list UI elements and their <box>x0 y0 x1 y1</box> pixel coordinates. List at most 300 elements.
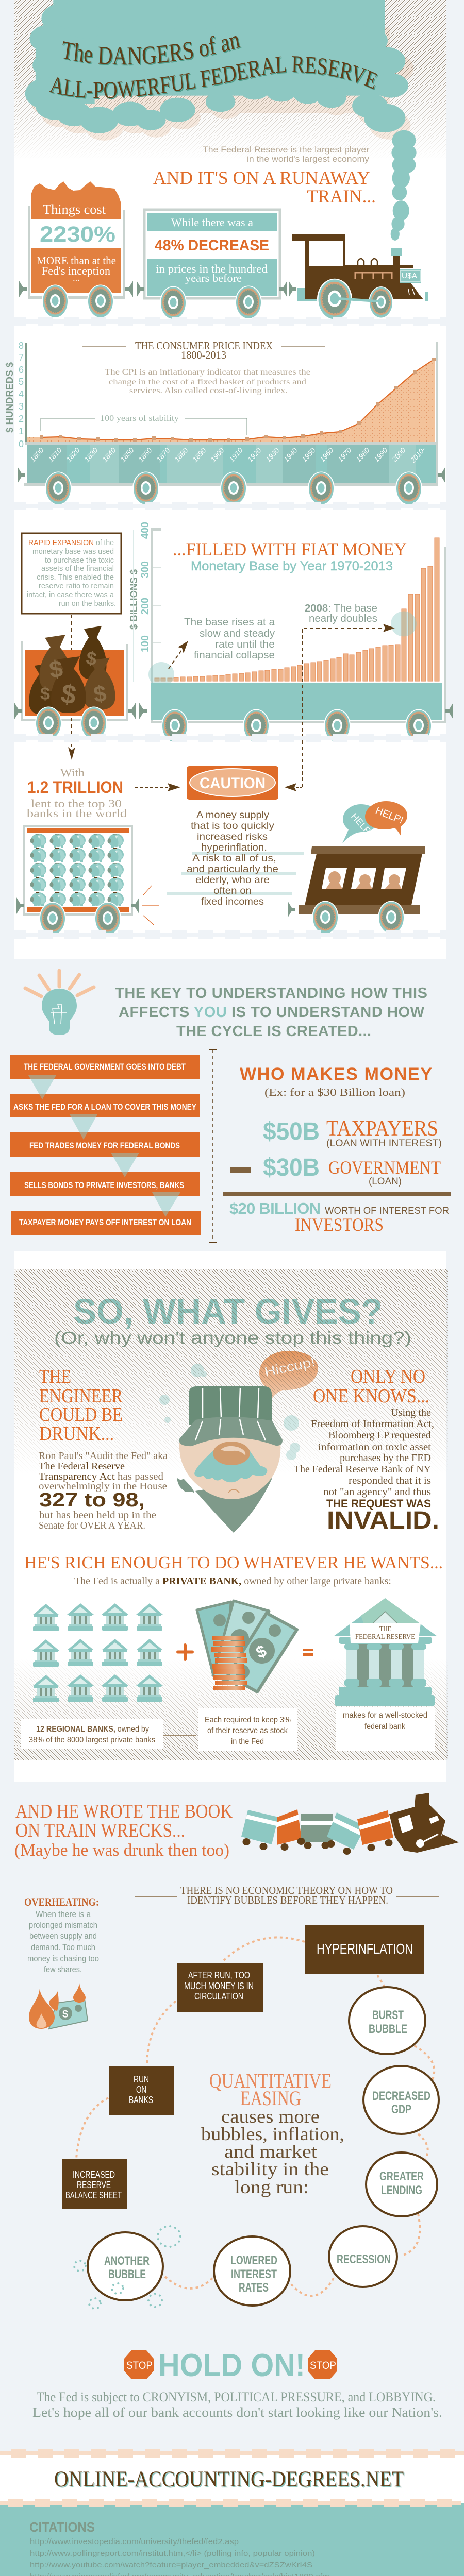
year labels: 2000 <box>390 446 407 464</box>
year labels: 1840 <box>101 446 118 464</box>
train car 2: 48% decrease: While there was a <box>171 216 253 229</box>
speech bubbles: help: HELP! <box>374 805 405 826</box>
heading: runaway train: AND IT'S ON A RUNAWAY <box>153 167 370 188</box>
row: government <box>230 1154 441 1187</box>
year labels: 1910 <box>227 446 244 464</box>
track <box>0 734 464 742</box>
icon: burning money: $ <box>62 2009 68 2020</box>
caution text: increased risks <box>197 832 268 842</box>
annotation: slow rise: financial collapse <box>194 650 275 661</box>
year labels: 1970 <box>336 446 353 464</box>
row: government: (LOAN) <box>369 1176 402 1187</box>
text: freedom of information: responded that it is <box>349 1475 431 1486</box>
orange motion lines <box>142 886 159 925</box>
year labels: 2010- <box>408 445 427 465</box>
chart title: 1800-2013 <box>181 349 226 361</box>
citations: http://www.pollingreport.com/institut.htm,</li> (polling info, popular opinion) <box>30 2549 315 2558</box>
circle: decreased gdp <box>363 2066 439 2134</box>
box: run on banks: BANKS <box>129 2095 153 2105</box>
axis labels: 300 <box>139 561 151 578</box>
quantitative easing: EASING <box>240 2087 301 2110</box>
year labels: 1880 <box>173 446 190 464</box>
result: 20 billion <box>229 1199 449 1235</box>
heading: engineer could be drunk: DRUNK... <box>39 1423 114 1445</box>
text: overheating: demand. Too much <box>31 1942 95 1952</box>
hat <box>189 1386 272 1425</box>
citations: CITATIONS <box>29 2519 95 2535</box>
coin stack <box>211 1636 247 1690</box>
train car 1: 2230%: 2230% <box>40 222 115 247</box>
locomotive <box>289 234 428 320</box>
who makes money: (Ex: for a $30 Billion loan) <box>264 1086 405 1098</box>
caution sign: CAUTION <box>200 775 266 792</box>
y axis labels: 4 <box>19 389 24 399</box>
banner: THE <box>379 1625 391 1633</box>
annotation: 2008: 2008: The base <box>305 603 377 614</box>
heading: no one knows: ONE KNOWS... <box>313 1385 429 1407</box>
circle: burst bubble <box>349 1987 425 2054</box>
box: run on banks: ON <box>136 2084 146 2095</box>
equals sign <box>303 1649 313 1656</box>
year labels: 1860 <box>137 446 154 464</box>
text: freedom of information <box>294 1407 439 1534</box>
year labels: 1900 <box>209 446 226 464</box>
annotation: slow rise <box>184 617 275 661</box>
quantitative easing: long run: <box>235 2177 309 2197</box>
axis labels: 400 <box>139 522 151 539</box>
track <box>0 930 464 939</box>
circle: another bubble: BUBBLE <box>108 2267 146 2281</box>
result: 20 billion: $20 BILLION <box>229 1199 321 1217</box>
text: overheating <box>24 1895 99 1974</box>
windows with passengers <box>322 868 406 889</box>
icons: 12 regional banks <box>32 1603 163 1702</box>
train car: money bags <box>14 615 136 747</box>
divider <box>209 1050 217 1242</box>
closing text: The Fed is subject to CRONYISM, POLITICAL PRESSURE, and LOBBYING. <box>37 2389 436 2404</box>
down arrows <box>28 1075 180 1217</box>
text: audit the fed: The Federal Reserve <box>39 1461 125 1472</box>
quantitative easing: and market <box>224 2141 317 2162</box>
caption: reserve <box>198 1708 297 1751</box>
text: overheating: When there is a <box>36 1909 91 1919</box>
chart: monetary base <box>129 522 453 743</box>
quantitative easing: QUANTITATIVE <box>209 2069 332 2092</box>
money bags: $ <box>85 647 98 669</box>
axis labels <box>139 522 151 652</box>
circle: lowered interest rates: INTEREST <box>231 2267 277 2281</box>
caption: well-stocked: federal bank <box>364 1722 406 1731</box>
axis labels: 100 <box>139 635 151 652</box>
annotation: slow rise: slow and steady <box>200 628 275 639</box>
icon: federal reserve building <box>334 1598 437 1706</box>
train car 1: 2230%: Things cost <box>43 202 106 217</box>
year labels: 1820 <box>64 446 81 464</box>
caption: reserve: in the Fed <box>231 1737 264 1746</box>
heading: engineer could be drunk: THE <box>39 1366 71 1387</box>
banner: FEDERAL RESERVE <box>355 1633 415 1641</box>
axis labels: 200 <box>139 598 151 615</box>
year labels: 1800 <box>28 446 45 464</box>
annotation: stability <box>41 413 247 435</box>
arrow: slow rise <box>169 641 188 669</box>
cpi description <box>105 368 310 395</box>
step 5 <box>11 1211 201 1235</box>
year labels: 1870 <box>155 446 172 464</box>
text: audit the fed: 327 to 98, <box>39 1489 145 1511</box>
intro text: in the world's largest economy <box>247 154 370 164</box>
annotation: 2008 <box>305 603 377 624</box>
speech bubbles: help: HELP! <box>349 811 375 838</box>
heading: rich enough: HE'S RICH ENOUGH TO DO WHATEVER HE WANTS... <box>24 1553 443 1572</box>
rapid expansion box: reserve ratio to remain <box>39 582 114 590</box>
chart: consumer price index <box>5 340 445 505</box>
train car body with years <box>18 442 445 505</box>
money bags <box>29 626 115 715</box>
trillion text: With <box>60 766 85 779</box>
heading: engineer could be drunk <box>39 1366 123 1445</box>
intro text: The Federal Reserve is the largest player <box>203 145 369 155</box>
citations: http://www.investopedia.com/university/thefed/fed2.asp <box>30 2537 239 2546</box>
heading: train wrecks <box>14 1801 233 1860</box>
step 2 <box>10 1094 200 1117</box>
cloud smoke <box>25 0 417 241</box>
heading: no economic theory: IDENTIFY BUBBLES BEFORE THEY HAPPEN. <box>187 1894 388 1906</box>
engineer illustration <box>159 1364 300 1533</box>
box: after run: MUCH MONEY IS IN <box>184 1981 254 1991</box>
chart title: THE CONSUMER PRICE INDEX <box>135 340 273 352</box>
chart title <box>135 340 273 361</box>
stop sign left <box>124 2350 154 2379</box>
row: taxpayers <box>263 1117 442 1149</box>
text: audit the fed <box>39 1450 168 1531</box>
year labels: 1850 <box>119 446 136 464</box>
quantitative easing: bubbles, inflation, <box>201 2124 344 2144</box>
hatch top <box>14 1269 448 1475</box>
speech bubble: hiccup: Hiccup! <box>263 1354 317 1380</box>
text: freedom of information: purchases by the FED <box>340 1452 431 1464</box>
cpi description: services. Also called cost-of-living index. <box>129 386 288 395</box>
annotation: 2008: nearly doubles <box>309 613 377 624</box>
moustache <box>194 1449 267 1482</box>
year labels: 1990 <box>372 446 389 464</box>
trillion text <box>27 766 127 820</box>
train car 2: 48% decrease: in prices in the hundred <box>156 262 268 275</box>
area and line <box>27 358 436 442</box>
caution text: and particularly the <box>187 864 278 875</box>
heading: runaway train <box>153 167 376 207</box>
heading: no one knows <box>313 1366 429 1407</box>
year labels: 1920 <box>246 446 263 464</box>
panel: runaway train <box>5 0 453 959</box>
step 3: FED TRADES MONEY FOR FEDERAL BONDS <box>29 1141 180 1150</box>
text: overheating: OVERHEATING: <box>24 1895 99 1908</box>
cpi description: The CPI is an inflationary indicator that measures the <box>105 368 310 377</box>
nose <box>213 1442 250 1465</box>
y axis labels: 8 <box>19 341 24 351</box>
y axis labels: 7 <box>19 352 24 363</box>
face <box>179 1435 280 1499</box>
train car: piggy banks <box>16 826 139 936</box>
citations <box>29 2519 441 2576</box>
heading: train wrecks: ON TRAIN WRECKS... <box>15 1820 185 1841</box>
title: ALL-POWERFUL FEDERAL RESERVE <box>51 57 378 99</box>
annotation: stability: 100 years of stability <box>100 413 179 423</box>
box: increased reserve <box>62 2159 127 2209</box>
circle: recession <box>329 2226 397 2287</box>
circle: lowered interest rates: RATES <box>239 2281 269 2295</box>
caution text: that is too quickly <box>191 821 275 832</box>
stop sign right: STOP <box>310 2360 336 2371</box>
year labels: 1940 <box>282 446 299 464</box>
circle: lowered interest rates <box>214 2236 290 2306</box>
year labels: 1830 <box>82 446 100 464</box>
caution text: fixed incomes <box>201 896 264 907</box>
train car 1: 2230%: Fed's inception <box>42 264 110 277</box>
circle: another bubble: ANOTHER <box>104 2254 150 2268</box>
step 4 <box>10 1172 200 1196</box>
title: The DANGERS of an <box>63 36 240 65</box>
who makes money: WHO MAKES MONEY <box>240 1064 432 1084</box>
train car 1: 2230% <box>19 181 133 318</box>
text: freedom of information: not "an agency" and thus <box>323 1486 431 1498</box>
row: government: GOVERNMENT <box>328 1157 441 1178</box>
intro text <box>203 145 370 164</box>
circle: burst bubble: BURST <box>372 2008 404 2022</box>
arrow: down to trillion <box>68 747 75 760</box>
heading: no one knows: ONLY NO <box>351 1366 425 1387</box>
heading: runaway train: TRAIN... <box>307 186 376 207</box>
caption: regional banks: 12 REGIONAL BANKS, owned by <box>36 1725 149 1734</box>
text: audit the fed: Transparency Act has passed <box>39 1471 163 1482</box>
stop sign right <box>308 2350 337 2379</box>
y axis labels: 6 <box>19 365 24 375</box>
subheading: Monetary Base by Year 1970-2013 <box>191 559 393 573</box>
y axis labels: 5 <box>19 377 24 387</box>
section: the cycle <box>10 971 451 1242</box>
box: after run <box>177 1963 263 2012</box>
money bags: $ <box>59 679 78 710</box>
panel: so what gives <box>14 1251 448 1782</box>
box: increased reserve: RESERVE <box>77 2180 111 2190</box>
speech bubble: hiccup <box>259 1351 318 1399</box>
caution text: elderly, who are <box>195 875 270 886</box>
circle: decreased gdp: DECREASED <box>372 2089 430 2103</box>
heading: no economic theory <box>135 1884 439 1906</box>
row: taxpayers: (LOAN WITH INTEREST) <box>326 1138 442 1149</box>
title: SO, WHAT GIVES? <box>73 1292 383 1331</box>
circle: burst bubble: BUBBLE <box>369 2022 407 2036</box>
year labels: 1980 <box>354 446 371 464</box>
money bags: $ <box>92 681 108 707</box>
speech bubbles: help <box>342 801 407 843</box>
caution text: A money supply <box>196 810 270 821</box>
money bags: $ <box>40 684 50 704</box>
rapid expansion box: assets of the financial <box>41 564 114 573</box>
box: after run: AFTER RUN, TOO <box>188 1970 250 1980</box>
icon: light bulb <box>25 971 94 1035</box>
caution text: often on <box>213 886 252 896</box>
caption: reserve: of their reserve as stock <box>207 1726 288 1735</box>
text: overheating: prolonged mismatch <box>29 1920 97 1930</box>
steps: cycle <box>10 1055 201 1235</box>
text: freedom of information: Using the <box>391 1407 431 1418</box>
arrow: trillion to caution <box>135 783 180 791</box>
heading: train wrecks: (Maybe he was drunk then too) <box>14 1841 229 1860</box>
y axis labels: 3 <box>19 401 24 412</box>
step 2: ASKS THE FED FOR A LOAN TO COVER THIS MONEY <box>13 1102 197 1112</box>
rapid expansion box <box>22 533 121 614</box>
year labels: 1950 <box>300 446 317 464</box>
box: hyperinflation: HYPERINFLATION <box>317 1941 413 1957</box>
train car 1: 2230%: MORE than at the <box>37 254 116 267</box>
piggy banks grid <box>30 834 124 906</box>
footer band <box>0 2449 464 2576</box>
row: taxpayers: TAXPAYERS <box>326 1117 438 1141</box>
rapid expansion box: RAPID EXPANSION of the <box>28 538 114 547</box>
y axis labels: 2 <box>19 414 24 424</box>
circle: greater lending: LENDING <box>381 2183 422 2197</box>
caption: well-stocked: makes for a well-stocked <box>343 1711 427 1720</box>
circle: greater lending <box>366 2153 437 2216</box>
track <box>0 502 464 510</box>
y axis labels <box>19 341 24 449</box>
year labels: 1890 <box>191 446 208 464</box>
axis title: $ BILLIONS $ <box>129 569 140 630</box>
text: freedom of information: Freedom of Information Act, <box>311 1418 434 1430</box>
stop sign left: STOP <box>126 2360 153 2371</box>
heading: key to understanding <box>115 985 427 1040</box>
rapid expansion box: intact, in case there was a <box>27 590 114 599</box>
y axis labels: 1 <box>19 426 24 436</box>
row: government: $30B <box>263 1154 320 1181</box>
arrow: 2008 to caution <box>285 624 395 791</box>
text: freedom of information: The Federal Reserve Bank of NY <box>294 1464 431 1475</box>
citations: http://www.youtube.com/watch?feature=player_embedded&v=dZSZwKrI4S <box>30 2561 312 2569</box>
flow connectors <box>76 1937 434 2296</box>
result: 20 billion: WORTH OF INTEREST FOR <box>325 1206 449 1216</box>
cpi description: change in the cost of a fixed basket of products and <box>109 378 306 386</box>
text: freedom of information: THE REQUEST WAS <box>326 1497 431 1510</box>
rapid expansion box: to purchase the toxic <box>45 556 114 565</box>
step 3 <box>10 1132 200 1157</box>
step 5: TAXPAYER MONEY PAYS OFF INTEREST ON LOAN <box>19 1217 191 1227</box>
heading: key to understanding: AFFECTS YOU IS TO UNDERSTAND HOW <box>119 1004 425 1021</box>
text: audit the fed: overwhelmingly in the House <box>39 1481 167 1492</box>
text: overheating: between supply and <box>29 1931 97 1941</box>
hiccup bubbles <box>159 1364 300 1460</box>
trillion text: banks in the world <box>27 807 127 820</box>
rapid expansion box: monetary base was used <box>32 547 114 556</box>
circle: recession: RECESSION <box>337 2252 391 2266</box>
track <box>0 317 464 326</box>
text: private bank: The Fed is actually a PRIVATE BANK, owned by other large private banks: <box>74 1575 391 1587</box>
text: audit the fed: but has been held up in the <box>39 1510 156 1521</box>
quantitative easing: causes more <box>221 2106 320 2127</box>
heading: train wrecks: AND HE WROTE THE BOOK <box>15 1801 233 1822</box>
box: hyperinflation <box>305 1925 424 1974</box>
bills <box>197 1601 297 1692</box>
hatch bottom <box>14 1659 448 1760</box>
title: The DANGERS of an <box>64 37 241 66</box>
quantitative easing: stability in the <box>211 2159 329 2179</box>
circle: another bubble <box>88 2232 163 2300</box>
train car 1: 2230%: ... <box>73 273 80 283</box>
heading: key to understanding: THE CYCLE IS CREATED... <box>176 1023 371 1040</box>
caution text <box>187 810 278 907</box>
site name: ONLINE-ACCOUNTING-DEGREES.NET <box>55 2468 405 2493</box>
icon: burning money <box>29 1983 88 2029</box>
title: ALL-POWERFUL FEDERAL RESERVE <box>49 56 377 98</box>
heading: fiat money: ...FILLED WITH FIAT MONEY <box>173 539 407 560</box>
box: increased reserve: INCREASED <box>73 2170 115 2180</box>
bandana <box>177 1478 272 1533</box>
y axis title: $ HUNDREDS $ <box>5 362 15 433</box>
annotation: slow rise: The base rises at a <box>184 617 275 628</box>
text: freedom of information: information on toxic asset <box>318 1442 431 1453</box>
text: overheating: money is chasing too <box>27 1954 99 1963</box>
step 1: THE FEDERAL GOVERNMENT GOES INTO DEBT <box>24 1062 186 1072</box>
dotted bubbles <box>74 2226 180 2309</box>
year labels: 1930 <box>264 446 281 464</box>
subtitle: (Or, why won't anyone stop this thing?) <box>54 1328 411 1347</box>
box: run on banks <box>109 2066 174 2115</box>
text: freedom of information: Bloomberg LP requested <box>328 1430 431 1441</box>
closing text <box>32 2389 442 2420</box>
year labels <box>28 445 427 465</box>
y axis labels: 0 <box>19 439 24 449</box>
cloud shadow <box>30 28 413 141</box>
locomotive: U$A <box>402 272 417 280</box>
train car: passengers <box>288 846 425 935</box>
train car 2: 48% decrease: 48% DECREASE <box>155 237 269 254</box>
trillion text: lent to the top 30 <box>31 797 122 810</box>
step 1 <box>10 1055 200 1079</box>
illustration: train wreck <box>241 1793 459 1855</box>
heading: engineer could be drunk: ENGINEER <box>39 1385 123 1407</box>
year labels: 1960 <box>318 446 335 464</box>
bills: $ <box>253 1641 269 1662</box>
site name: ONLINE-ACCOUNTING-DEGREES.NET <box>54 2467 404 2492</box>
heading: key to understanding: THE KEY TO UNDERSTANDING HOW THIS <box>115 985 427 1002</box>
closing text: Let's hope all of our bank accounts don't start looking like our Nation's. <box>32 2405 442 2420</box>
caution text: A risk to all of us, <box>192 853 276 864</box>
step 4: SELLS BONDS TO PRIVATE INVESTORS, BANKS <box>24 1180 184 1190</box>
plus sign <box>178 1645 192 1659</box>
caption: reserve: Each required to keep 3% <box>205 1716 291 1724</box>
heading: hold on: HOLD ON! <box>158 2348 305 2383</box>
banner <box>350 1623 421 1643</box>
bars <box>155 538 439 681</box>
caution sign <box>187 766 278 800</box>
box: increased reserve: BALANCE SHEET <box>65 2190 122 2200</box>
box: run on banks: RUN <box>134 2074 149 2084</box>
circle: lowered interest rates: LOWERED <box>230 2253 277 2267</box>
year labels: 1810 <box>46 446 63 464</box>
trillion text: 1.2 TRILLION <box>27 778 123 796</box>
text: audit the fed: Ron Paul's "Audit the Fed" aka <box>39 1450 168 1462</box>
text: audit the fed: Senate for OVER A YEAR. <box>39 1520 145 1531</box>
text: freedom of information: INVALID. <box>327 1507 439 1534</box>
money bags: $ <box>47 655 64 683</box>
train car 2: 48% decrease: years before <box>185 272 242 284</box>
box: after run: CIRCULATION <box>194 1991 243 2002</box>
caption: well-stocked <box>336 1707 435 1751</box>
circle: greater lending: GREATER <box>379 2170 424 2183</box>
rapid expansion box: run on the banks. <box>59 599 116 608</box>
highlight circles <box>148 662 174 687</box>
icon: money and coins <box>197 1601 297 1692</box>
